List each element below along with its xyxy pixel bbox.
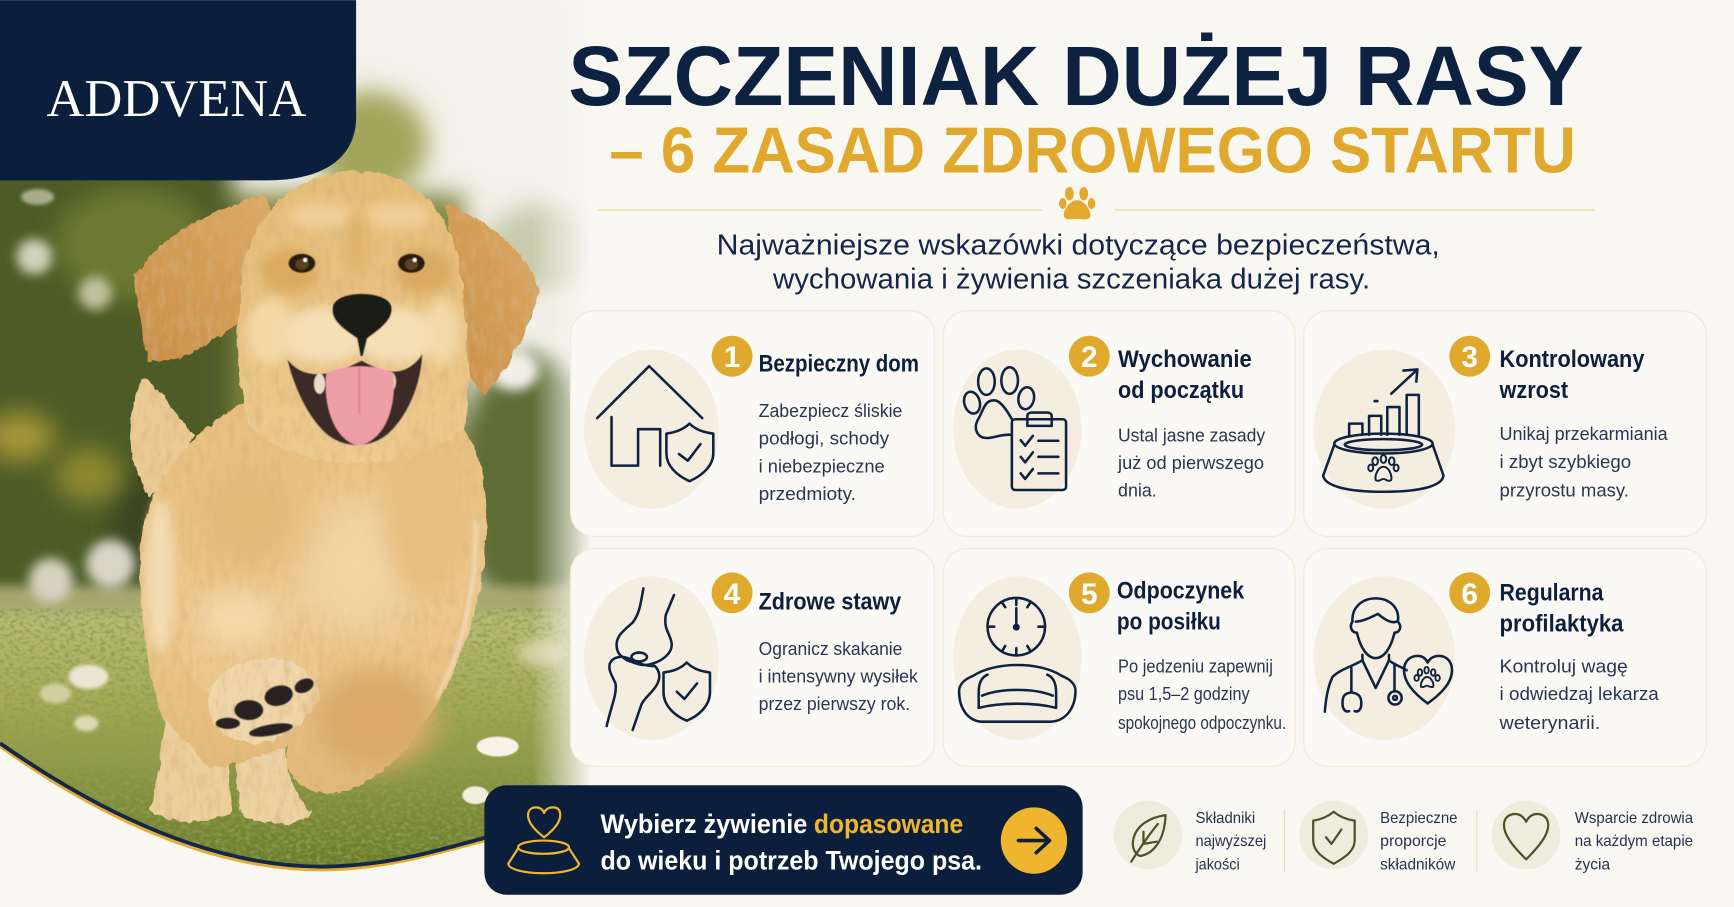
number badge 5: 5 <box>1081 578 1098 611</box>
body <box>140 382 487 793</box>
banner text: do wieku i potrzeb Twojego psa. <box>600 845 982 875</box>
photo background: trees, sky and grass <box>0 62 589 865</box>
card 1 text: podłogi, schody <box>759 428 890 449</box>
card 3 text: i zbyt szybkiego <box>1500 451 1631 472</box>
number badge 5 <box>1069 572 1110 613</box>
logo text: ADDVENA <box>46 70 306 128</box>
eye left <box>289 254 315 273</box>
card 5 heading: po posiłku <box>1117 608 1221 635</box>
raised paw <box>208 658 321 743</box>
card 4 text: i intensywny wysiłek <box>759 665 918 686</box>
puppy <box>130 172 540 824</box>
raised foreleg <box>180 580 318 699</box>
icon: shield <box>1313 812 1355 864</box>
card 2 heading <box>1118 346 1252 404</box>
hind foot left <box>148 697 234 822</box>
card 4 heading: Zdrowe stawy <box>759 588 902 615</box>
right ear <box>445 202 540 394</box>
number badge 4: 4 <box>724 578 741 611</box>
card 2 text: dnia. <box>1118 480 1157 501</box>
number badge 2: 2 <box>1081 341 1098 374</box>
card 3 heading <box>1499 346 1645 404</box>
card 1 text: Zabezpiecz śliskie <box>759 400 902 421</box>
card 1 text: i niebezpieczne <box>759 455 885 476</box>
banner text: dopasowane <box>814 809 963 839</box>
icon: paw and checklist <box>962 367 1066 490</box>
benefit: safe proportions <box>1299 801 1458 873</box>
card 6: regular prevention <box>1304 549 1706 766</box>
card 2 text: już od pierwszego <box>1117 452 1264 473</box>
card 6 text: weterynarii. <box>1499 712 1600 733</box>
photo: golden retriever puppy running on a meadow <box>0 62 589 865</box>
card 4 text: Ogranicz skakanie <box>759 638 902 659</box>
card 2 text <box>1117 424 1266 501</box>
card 3 text: przyrostu masy. <box>1500 480 1629 501</box>
card 6 text: Kontroluj wagę <box>1500 655 1628 676</box>
icon: house with shield <box>597 366 713 481</box>
card 5 heading: Odpoczynek <box>1117 577 1245 604</box>
fur shading <box>147 202 476 769</box>
benefit text: Bezpieczne <box>1380 810 1458 827</box>
hind foot middle <box>236 730 312 824</box>
card 4 text <box>759 638 918 714</box>
card 3 heading: wzrost <box>1499 377 1568 404</box>
card 1 text: przedmioty. <box>759 483 856 504</box>
subtitle gold: – 6 ZASAD ZDROWEGO STARTU <box>609 114 1576 187</box>
benefit text: Składniki <box>1195 810 1255 827</box>
card 3: controlled growth <box>1304 311 1706 536</box>
banner text <box>600 809 982 875</box>
number badge 3 <box>1449 336 1490 377</box>
card 5: rest after meal <box>943 549 1295 766</box>
icon: knee joint with shield <box>607 588 710 730</box>
card 1 text <box>759 400 902 504</box>
face features <box>216 254 438 739</box>
benefit text: życia <box>1575 856 1611 873</box>
navy curve <box>0 743 487 867</box>
card 2 heading: Wychowanie <box>1118 346 1252 373</box>
card 2 heading: od początku <box>1118 377 1244 404</box>
benefit: top quality ingredients <box>1114 801 1266 873</box>
benefit text: proporcje <box>1380 833 1446 850</box>
benefit: health support <box>1492 801 1693 873</box>
muzzle <box>282 306 438 364</box>
tail <box>130 378 195 498</box>
left ear <box>135 195 271 361</box>
call-to-action banner <box>484 785 1083 895</box>
benefit text <box>1195 810 1266 873</box>
card 5 text: spokojnego odpoczynku. <box>1118 712 1286 733</box>
title <box>568 29 1584 187</box>
teeth <box>314 372 396 394</box>
card 3 text <box>1500 423 1668 501</box>
number badge 1 <box>712 336 753 377</box>
head and neck ruff <box>238 172 469 463</box>
icon: heart <box>1504 814 1548 859</box>
arrow button <box>1001 807 1067 874</box>
benefit text <box>1575 810 1693 873</box>
number badge 6 <box>1449 572 1490 613</box>
card 5 text <box>1118 655 1286 733</box>
card 6 heading: Regularna <box>1500 580 1604 607</box>
number badge 4 <box>712 572 753 613</box>
card 6 heading: profilaktyka <box>1500 611 1624 638</box>
icon: clock above dog bed <box>959 598 1076 722</box>
icon: growth bars over bowl with paw <box>1323 369 1443 492</box>
card 6 text: i odwiedzaj lekarza <box>1500 683 1659 704</box>
card 6 text <box>1499 655 1659 733</box>
number badge 2 <box>1069 336 1110 377</box>
benefit text: Wsparcie zdrowia <box>1575 810 1693 827</box>
tongue <box>326 366 394 446</box>
banner text: Wybierz żywienie <box>600 809 807 839</box>
card 4 text: przez pierwszy rok. <box>759 693 910 714</box>
card 3 text: Unikaj przekarmiania <box>1500 423 1668 444</box>
benefit text: najwyższej <box>1195 833 1266 850</box>
title: SZCZENIAK DUŻEJ RASY <box>568 29 1584 123</box>
card 1 heading: Bezpieczny dom <box>759 351 919 378</box>
benefit text: na każdym etapie <box>1575 833 1693 850</box>
card 3 heading: Kontrolowany <box>1500 346 1645 373</box>
paw pads <box>216 676 316 739</box>
number badge 6: 6 <box>1461 578 1478 611</box>
benefit text: składników <box>1380 856 1456 873</box>
mouth <box>288 354 422 445</box>
icon: leaf <box>1131 815 1166 862</box>
intro text: Najważniejsze wskazówki dotyczące bezpieczeństwa, <box>717 229 1440 261</box>
card 6 heading <box>1500 580 1624 638</box>
icon: vet with stethoscope and paw heart <box>1325 598 1452 712</box>
card 5 text: psu 1,5–2 godziny <box>1118 683 1250 704</box>
logo panel <box>0 0 356 180</box>
card 5 text: Po jedzeniu zapewnij <box>1118 655 1273 676</box>
card 5 heading <box>1117 577 1245 635</box>
card 2: training <box>943 311 1295 536</box>
benefit text <box>1380 810 1458 873</box>
curved accent at bottom of the photo <box>0 743 487 870</box>
nose <box>332 294 392 356</box>
benefit text: jakości <box>1195 856 1240 873</box>
gold curve <box>0 747 487 870</box>
card 2 text: Ustal jasne zasady <box>1118 424 1266 445</box>
intro text <box>717 229 1440 296</box>
card 4: healthy joints <box>571 549 934 766</box>
divider with paw <box>598 187 1595 219</box>
card 1: safe home <box>571 311 934 536</box>
intro text: wychowania i żywienia szczeniaka dużej rasy. <box>772 264 1370 296</box>
icon: bowl with heart <box>508 807 579 873</box>
number badge 1: 1 <box>724 341 740 374</box>
number badge 3: 3 <box>1461 341 1478 374</box>
puppy fur shapes <box>130 172 540 824</box>
eye right <box>398 254 425 273</box>
